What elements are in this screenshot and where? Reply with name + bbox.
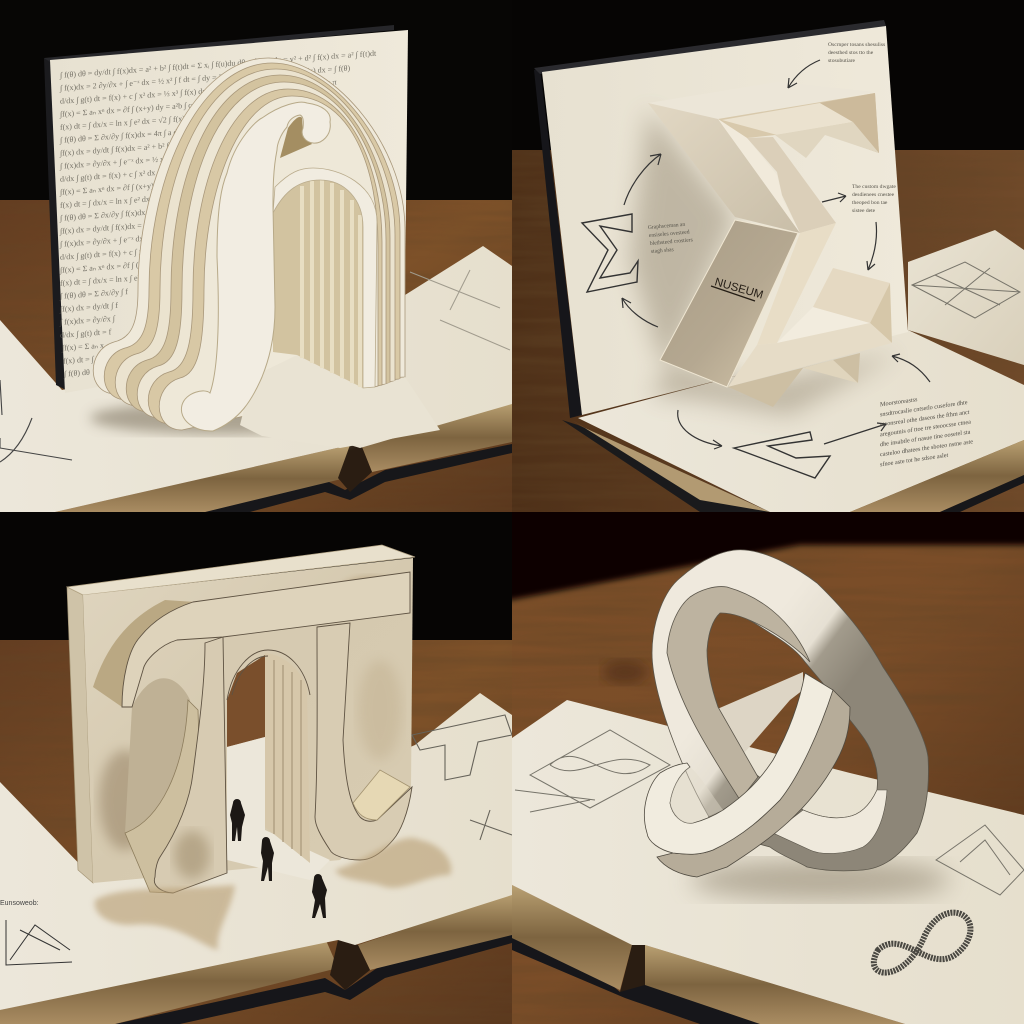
caption: Eunsoweob: — [0, 900, 39, 907]
shadow under rings — [690, 860, 950, 900]
lower right band — [757, 223, 836, 345]
back page with formulas: f(x) dt = ∫ dx/x = ln x ∫ e² dx = √2 ∫ f(x) dx = ∞ ∫ x y dy ∫ f(x) dx = ∫ f dy = a + b² — [60, 105, 316, 132]
back page with formulas: d/dx ∫ g(t) dt = f(x) + c ∫ x² dx = ⅓ x³ ∫ f(x) dx — [60, 165, 206, 184]
central ribs — [265, 653, 310, 863]
upper ring body — [652, 550, 928, 871]
caption texts on sigma page: theoped bon tae — [852, 200, 888, 206]
caption texts on sigma page: blethsteed crostiers — [650, 237, 693, 247]
front arch band — [273, 168, 377, 388]
top bar — [122, 572, 410, 707]
carved arch lines — [227, 650, 310, 700]
body text on floor page: stoonsreal othe daseos the fthm anct — [880, 409, 970, 428]
caption texts on sigma page: stagh shas — [651, 247, 674, 255]
back page — [534, 20, 908, 418]
right sketch of pi on page — [412, 715, 512, 840]
back page with formulas: ∫ f(x)dx = ∂y/∂x + ∫ e⁻ˣ dx = ½ x² — [59, 232, 167, 249]
tiny walking figures — [230, 799, 327, 918]
back page with formulas: ∫ f(θ) dθ = Σ ∂x/∂y ∫ f(x)dx = 4π ∫ a dx — [59, 205, 181, 223]
body text on floor page: Moorstoreastss — [880, 396, 918, 408]
front twisted band face — [644, 673, 833, 854]
body text on floor page — [880, 388, 973, 468]
book pages — [0, 693, 512, 1024]
back page with formulas: ∫ f(θ) dθ = dy/dt ∫ f(x)dx = a² + b² ∫ f(t)dt = Σ xᵢ ∫ f(u)du dθ = ∫ g(x) dx = y² + d² ∫ f(x) dx = a² ∫ f(t)dt — [59, 49, 377, 80]
back page with formulas: d/dx ∫ g(t) dt = f(x) + c ∫ x² dx — [60, 246, 155, 262]
panel: integral pop-up book — [0, 25, 512, 512]
left leg — [154, 637, 227, 893]
top flap and box — [648, 82, 875, 119]
floor patch in front of arch — [240, 355, 440, 448]
body text on floor page: snsdtrocaslie cntsetlo cusefore dhte — [880, 399, 968, 418]
book pages — [562, 230, 1024, 512]
small sigma drawing on back page — [582, 214, 638, 292]
lower ring strip — [715, 672, 803, 765]
left shoulder fan — [93, 600, 195, 707]
underside legs — [728, 353, 860, 407]
stacked back pages of pi book — [67, 545, 415, 883]
back page with formulas: ∫ f(x)dx = 2 ∂y/∂x + ∫ e⁻ˣ dx = ½ x² ∫ f dt = ∫ dy = 2π ∫ r dr dθ = x³ ∫ dx = ½ ∫ f(x) dx = ∫ f(θ) — [59, 63, 351, 93]
back page with formulas: ∫ f(x)dx = ∂y/∂x ∫ — [59, 314, 116, 327]
back page with formulas — [44, 25, 408, 393]
back page with formulas: ∫f(x) = Σ aₙ xⁿ dx = ∂f ∫ (x+y) dy = a²b ∫ cos θ dθ = ∫ f d ∫ x dy = ∫ f(x) dx = a ∫ dt — [59, 92, 316, 119]
caption texts on sigma page: deesthed stos tto the — [828, 50, 874, 56]
body text on floor page: casteloo dhatees the sboteo nstne aste — [880, 438, 973, 458]
folded sigma shape — [648, 82, 892, 407]
left rib fan — [125, 700, 200, 893]
back page with formulas: f(x) dt = ∫ dx/x = ln x ∫ e² — [60, 273, 141, 288]
back page with formulas: d/dx ∫ g(t) dt = f — [60, 327, 112, 340]
label on sigma: MUSEUM: NUSEUM — [713, 276, 764, 302]
caption texts on sigma page: sistee dete — [852, 208, 876, 214]
front panel — [660, 220, 798, 387]
shadow under integral — [90, 402, 350, 434]
lower ring inner loop — [670, 767, 723, 823]
chart sketch on page — [6, 920, 72, 965]
back page with formulas: f(x) dt = ∫ dx/x = ln x ∫ e² dx = √2 ∫ f(x) dx — [60, 191, 195, 210]
panel: mobius ring pop-up book — [512, 512, 1024, 1024]
small sigma drawing on floor page — [734, 432, 830, 478]
ring inner wall — [667, 587, 810, 800]
back page with formulas: ∫ f(θ) dθ = Σ ∂x/∂y ∫ f — [59, 287, 128, 301]
pi shape — [93, 572, 412, 893]
figure-eight sketch — [874, 913, 970, 973]
back page with formulas: ∫f(x) dx = dy/dt ∫ f(x)dx = a² + b² ∫ f(t)dt = Σ xᵢ ∫ f(u) ∫ f dx ∫ g dy = a² — [59, 133, 280, 158]
caption texts on sigma page: Graphsceman an — [648, 222, 686, 231]
caption texts on sigma page: The custom dwgate — [852, 184, 896, 190]
bridge between legs — [223, 627, 317, 700]
front twisted band side — [657, 690, 850, 877]
bottom box — [777, 307, 870, 343]
back page with formulas: d/dx ∫ g(t) dt = f(x) + c ∫ x² dx = ⅓ x³ ∫ f(x) dx = π ∫ sin x dx = c + ∫ f(x) dx = ∫ y²dy = π — [60, 77, 337, 106]
caption texts on sigma page — [648, 42, 896, 255]
right leg — [315, 623, 412, 860]
back page with formulas: ∫f(x) dx = dy/dt ∫ f — [59, 301, 118, 314]
page sketches — [515, 730, 1024, 895]
panel: sigma pop-up book — [512, 20, 1024, 512]
see-through gap showing wood and floor — [227, 655, 265, 747]
body text on floor page: sfnoe aste tot he sdsoe aslet — [880, 452, 948, 468]
arch opening with paper ribs — [273, 180, 363, 388]
sigma diagram annotation arrows — [622, 60, 930, 449]
ring lower-right inner band — [773, 790, 887, 853]
back page with formulas: f(x) dt = ∫ dx — [63, 354, 104, 366]
hook ribs — [353, 770, 410, 820]
caption texts on sigma page: ensiseles ovesteed — [649, 229, 690, 239]
body text on floor page: aregoutnis of ttoe tre steoocsse ctnea — [880, 419, 971, 438]
water stains on pages — [95, 838, 451, 950]
back page with formulas: ∫f(x) = Σ aₙ xⁿ dx = ∂f ∫ (x+y) — [59, 259, 154, 275]
diagonal band — [648, 103, 800, 233]
open book base — [0, 246, 512, 512]
back page with formulas: ∫f(x) dx = dy/dt ∫ f(x)dx = a² + b² ∫ f(t) — [59, 218, 181, 236]
back page with formulas: ∫f(x) = Σ aₙ x — [61, 341, 104, 353]
book pages — [512, 700, 1024, 1024]
back page with formulas: ∫ f(x)dx = ∂y/∂x + ∫ e⁻ˣ dx = ½ x² ∫ f dt = ∫ dy = 2π — [59, 151, 221, 171]
dark stains on pi — [174, 831, 210, 879]
stacked paper layers — [93, 58, 405, 430]
inner left wall — [125, 678, 193, 890]
back page with formulas: ∫f(x) = Σ aₙ xⁿ dx = ∂f ∫ (x+y) dy = a²b ∫ cos θ — [59, 178, 205, 197]
back page with formulas: ∫ f(θ) dθ = Σ ∂x/∂y ∫ f(x)dx = 4π ∫ a dx = a x + b ∫ dt = ∫ f(x) dx + ∫ dy = x — [59, 120, 292, 145]
back page with formulas: ∫ f(θ) dθ — [63, 368, 90, 379]
body text on floor page: dhe insabtle of nasue tine oosetel sta — [880, 429, 971, 448]
caption texts on sigma page: Oscrnper tosans shesuliss — [828, 42, 885, 48]
hook shadow — [280, 117, 312, 158]
shadow behind sigma — [630, 110, 900, 415]
panel: pi pop-up book — [0, 544, 512, 1024]
caption texts on sigma page: desdienees cnestee — [852, 192, 895, 198]
caption texts on sigma page: stosubutiare — [828, 58, 856, 64]
front face of integral — [181, 102, 330, 431]
paper-layer integral sign — [93, 58, 440, 448]
